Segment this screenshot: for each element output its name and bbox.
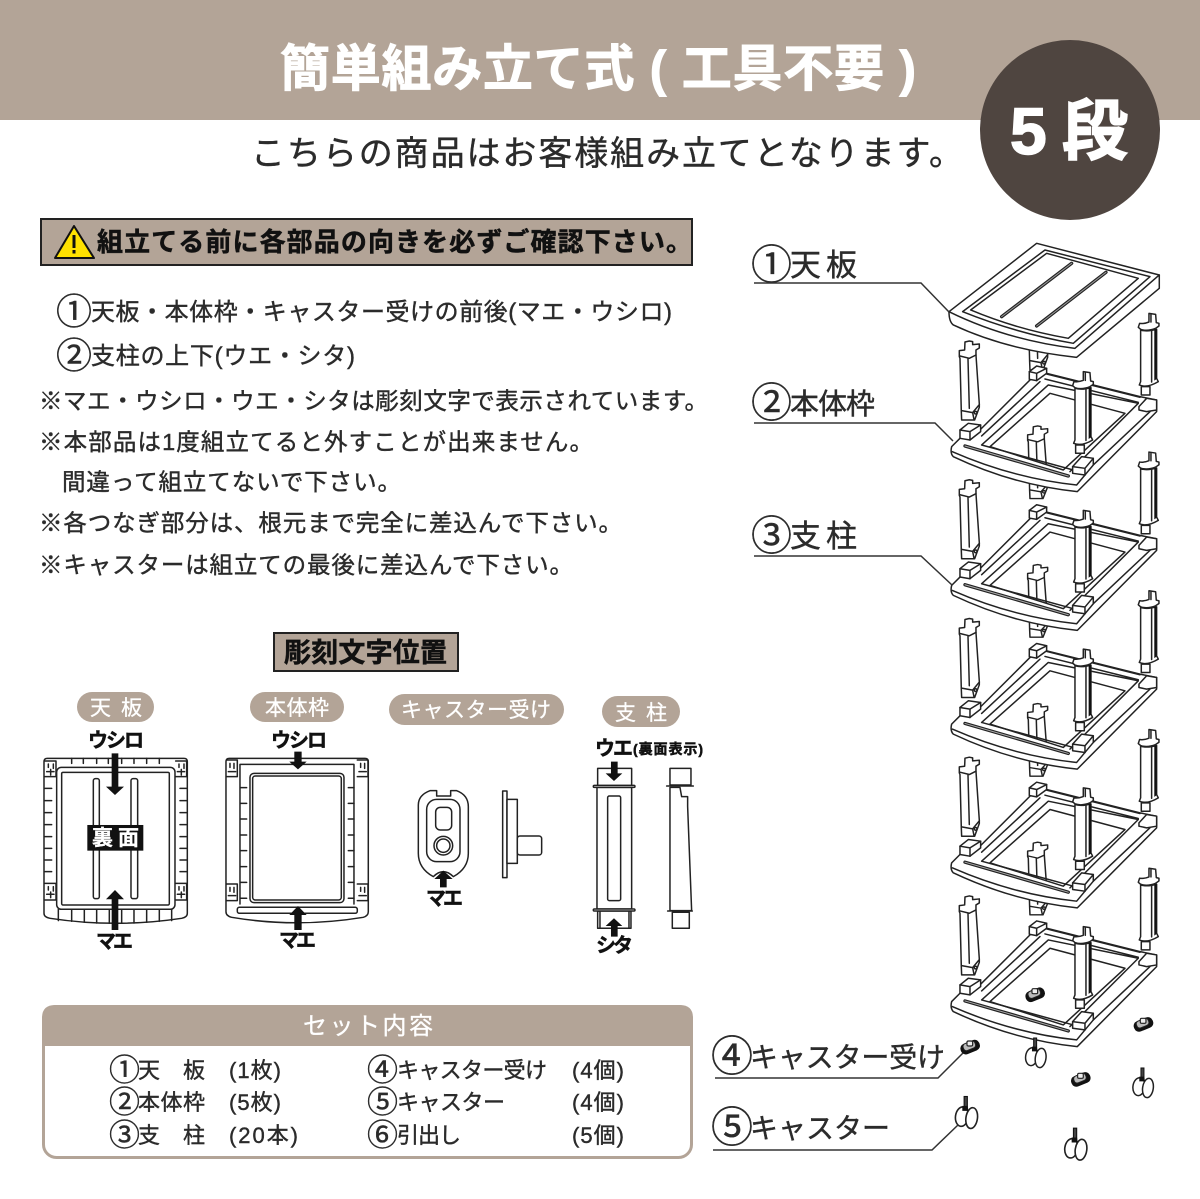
caster receivers and casters [954,986,1155,1161]
callout: 天板 [751,242,949,312]
back post tier 5 [1028,842,1048,915]
caster 2 [954,1096,979,1129]
instruction text block: ② [56,335,92,376]
parts list: (4個) [572,1090,624,1115]
shelf frame 2 [951,452,1159,630]
parts list: ④ [367,1053,398,1088]
heading: engraving positions [274,633,458,671]
pill: 支柱 [602,696,680,727]
callout: 天板: 天 板 [790,248,857,283]
parts list: 支 柱 [138,1123,205,1148]
callout: 支柱 [751,513,952,585]
title: 簡単組み立て式 ( 工具不要 ) [280,41,916,97]
shelf frame 4 [951,730,1159,908]
label: マエ: マエ [426,888,463,910]
diagram: post [593,737,703,957]
receiver 2 [959,1038,981,1056]
callout: 本体枠 [751,380,953,441]
label: 裏面: 裏 面 [92,827,139,850]
pill: 天板 [77,692,154,722]
exploded view: shelf assembly [949,243,1159,1047]
receiver 1 [1024,986,1046,1004]
diagram: caster receiver [418,791,542,910]
label: ウエ: ウエ [595,737,633,760]
pill: キャスター受け: キャスター受け [401,699,551,722]
diagram: main frame [226,729,368,952]
instruction text block: ※マエ・ウシロ・ウエ・シタは彫刻文字で表示されています。 [39,388,708,414]
label: ウシロ: ウシロ [88,729,144,752]
pill: キャスター受け [389,694,564,725]
callout: キャスター: キャスター [750,1113,890,1144]
callout: キャスター受け: キャスター受け [750,1042,945,1073]
shelf frame 5 [951,868,1159,1047]
heading: engraving positions: 彫刻文字位置 [284,638,447,668]
badge: 5段 [980,40,1160,220]
shelf frame 3 [951,591,1159,769]
parts list: キャスター受け [397,1058,547,1083]
label: 裏面表示: (裏面表示) [633,741,703,757]
parts list: ③ [109,1118,140,1153]
icon: warning triangle [55,226,94,258]
pill: 本体枠 [250,692,344,722]
instruction text block: ※本部品は1度組立てると外すことが出来ません。 [39,429,593,455]
panel header [42,1005,693,1046]
shelf frame 1 [951,313,1159,492]
instruction text block: ① [56,291,92,332]
badge: 5段: 5段 [1010,94,1128,168]
instruction text block: 支柱の上下(ウエ・シタ) [91,343,355,370]
callout: 支柱: ③ [751,513,792,559]
label: ウシロ: ウシロ [271,729,327,752]
instruction text block: 間違って組立てないで下さい。 [62,469,401,495]
caster 3 [1132,1068,1155,1098]
parts list: (5個) [572,1123,624,1148]
receiver 3 [1132,1016,1155,1033]
label: シタ: シタ [596,934,633,957]
parts list [109,1053,624,1153]
diagram: top board underside [44,729,187,953]
parts list: (4個) [572,1058,624,1083]
parts list: ① [109,1053,140,1088]
warning text: 組立てる前に各部品の向きを必ずご確認下さい。 [97,227,692,257]
panel: set contents [42,1005,693,1158]
pill: 支柱: 支 柱 [615,702,667,725]
parts list: (1枚) [229,1058,281,1083]
instruction text block [39,291,708,578]
callout: 本体枠: 本体枠 [790,388,875,421]
parts list: キャスター [397,1090,505,1115]
parts list: (5枚) [229,1090,281,1115]
back post tier 2 [1028,426,1048,499]
back post tier 3 [1028,565,1048,637]
parts list: 引出し [397,1123,461,1148]
parts list: (20本) [229,1123,298,1148]
callout: キャスター受け [711,1033,963,1080]
warning banner [41,219,692,265]
header band [0,0,1200,120]
parts list: ② [109,1085,140,1120]
receiver 4 [1069,1071,1092,1088]
pill: 天板: 天 板 [90,697,142,720]
parts list: ⑤ [367,1085,398,1120]
callout: 支柱: 支 柱 [790,519,857,554]
subtitle: こちらの商品はお客様組み立てとなります。 [251,135,963,173]
caster 4 [1064,1128,1088,1161]
caster 1 [1024,1038,1047,1068]
label: マエ: マエ [279,930,316,952]
instruction text block: 天板・本体枠・キャスター受けの前後(マエ・ウシロ) [91,299,672,326]
callout: キャスター [711,1104,958,1151]
instruction text block: ※キャスターは組立ての最後に差込んで下さい。 [39,552,573,578]
parts list: 本体枠 [138,1090,205,1115]
back post tier 4 [1028,704,1048,776]
callout: キャスター: ⑤ [711,1104,753,1151]
parts list: 天 板 [138,1058,205,1083]
back post tier 1 [1028,291,1048,370]
label: マエ: マエ [96,931,133,953]
callout: 本体枠: ② [751,380,792,426]
pill: 本体枠: 本体枠 [265,697,329,720]
callout: 天板: ① [751,242,792,288]
top board [949,243,1159,357]
panel heading text: セット内容 [303,1013,433,1040]
callout: キャスター受け: ④ [711,1033,753,1080]
parts list: ⑥ [367,1118,398,1153]
instruction text block: ※各つなぎ部分は、根元まで完全に差込んで下さい。 [39,510,622,536]
